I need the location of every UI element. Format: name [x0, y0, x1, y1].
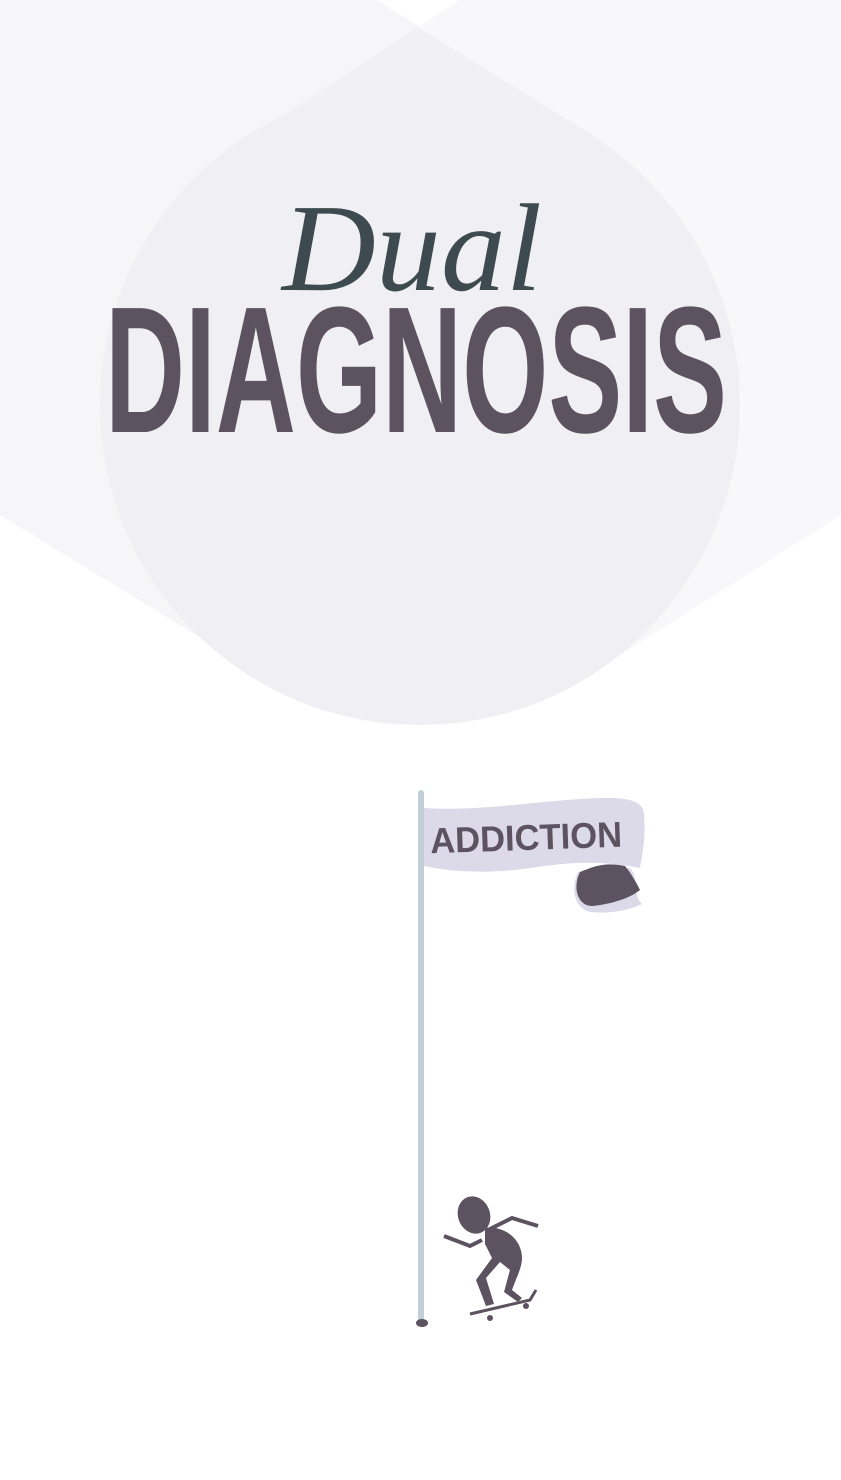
flag: addiction: [424, 798, 645, 913]
pole base: [416, 1319, 428, 1327]
background shape left: [0, 0, 600, 700]
flag label: ADDICTION: [429, 814, 623, 861]
flag pole: [418, 790, 424, 1325]
overlap region: [230, 27, 600, 500]
background shape right: [230, 0, 841, 655]
background circle: [100, 85, 740, 725]
title: Dual: Dual: [280, 180, 542, 318]
icon: skateboarder: [444, 1192, 538, 1321]
